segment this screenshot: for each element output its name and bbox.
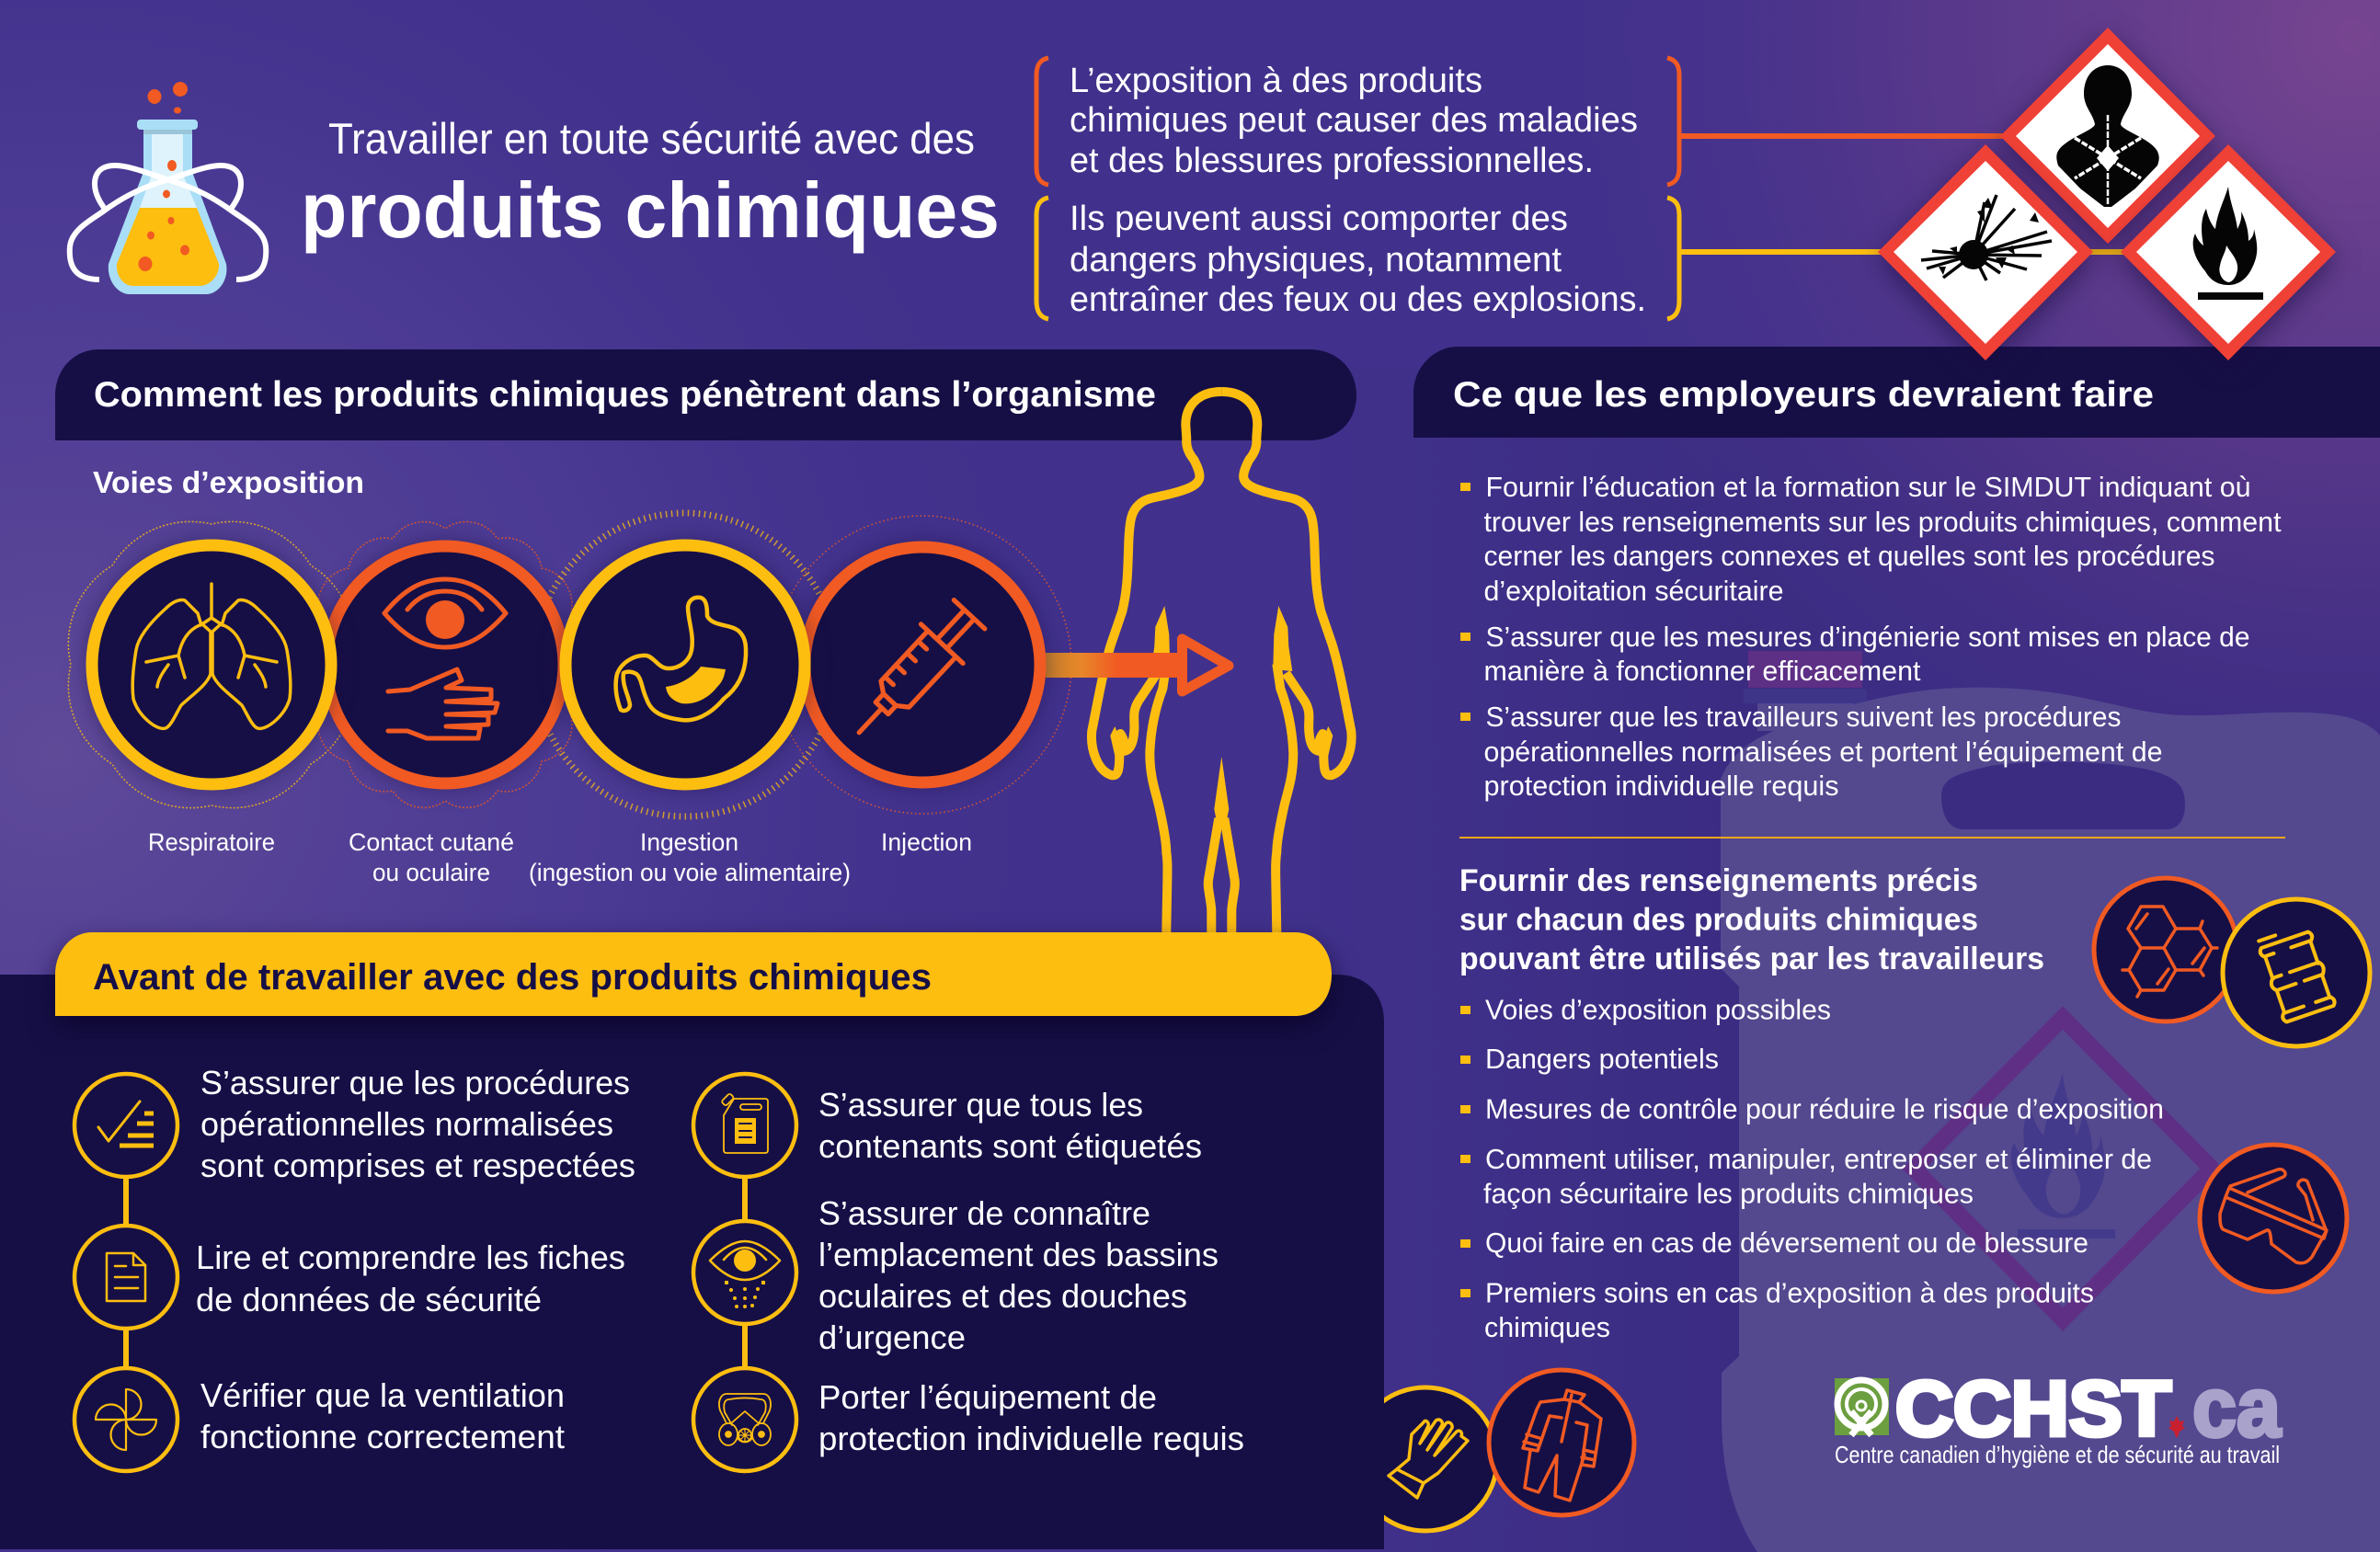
heading bar: left: Comment les produits chimiques pénètrent dans l’organisme: [94, 375, 1156, 415]
logo: CCHST: CCHST: [1895, 1365, 2171, 1452]
hazard diamond: flame: [2121, 144, 2336, 360]
route labels: Injection: [881, 828, 972, 856]
connectors: [126, 1125, 745, 1420]
information list: Quoi faire en cas de déversement ou de blessure: [1485, 1227, 2088, 1259]
logo: CCHST: [1835, 1361, 2282, 1468]
heading bar: right: Ce que les employeurs devraient faire: [1453, 375, 2154, 415]
arrow into body: [1046, 639, 1229, 691]
item: safety data sheets: Lire et comprendre les fiches: [196, 1238, 625, 1276]
dotted halos: [68, 513, 1071, 816]
text block: physical hazards: Ils peuvent aussi comporter des: [1070, 200, 1568, 238]
employer list: d’exploitation sécuritaire: [1484, 575, 1784, 607]
title: produits chimiques: [301, 167, 1000, 255]
route circle: ingestion: [566, 545, 805, 784]
item: ventilation: fonctionne correctement: [200, 1418, 565, 1455]
subheading: exposure routes: Voies d’exposition: [93, 465, 364, 499]
icon: eye and hand: [384, 579, 506, 738]
item: labelled containers: contenants sont étiquetés: [818, 1127, 1202, 1165]
text block: occupational illness: chimiques peut causer des maladies: [1070, 101, 1638, 140]
information list: Comment utiliser, manipuler, entreposer et éliminer de: [1485, 1143, 2152, 1175]
subheading: precise information: [1459, 863, 2044, 976]
route circle: respiratory: [92, 545, 331, 784]
route labels: Respiratoire: [148, 828, 275, 856]
icon: syringe: [838, 595, 990, 752]
employer list: [1460, 471, 2282, 802]
item: procedures: S’assurer que les procédures: [200, 1064, 630, 1101]
information list: Dangers potentiels: [1485, 1043, 1719, 1075]
logo: CCHST: Centre canadien d’hygiène et de sécurité au travail: [1835, 1441, 2280, 1468]
bracket and line: orange: [1036, 58, 2009, 185]
title: Travailler en toute sécurité avec des: [328, 114, 975, 163]
icon: body outline: [1092, 392, 1352, 932]
icon: stomach: [616, 598, 746, 720]
panel: before working: [0, 932, 1384, 1549]
employer list: protection individuelle requis: [1484, 770, 1839, 802]
item: eyewash: [693, 1194, 1219, 1356]
title: [301, 114, 1000, 255]
item: protective equipment: protection individuelle requis: [818, 1420, 1244, 1457]
item: ventilation: Vérifier que la ventilation: [200, 1376, 565, 1414]
watermark: flame diamond: [1914, 1018, 2212, 1319]
text block: physical hazards: entraîner des feux ou des explosions.: [1070, 280, 1646, 319]
text block: occupational illness: et des blessures professionnelles.: [1070, 142, 1594, 180]
text block: physical hazards: [1070, 200, 1646, 319]
employer list: S’assurer que les mesures d’ingénierie sont mises en place de: [1486, 621, 2249, 653]
employer list: cerner les dangers connexes et quelles sont les procédures: [1484, 540, 2214, 572]
text block: occupational illness: L’exposition à des produits: [1070, 62, 1482, 100]
item: procedures: sont comprises et respectées: [200, 1147, 635, 1184]
information list: façon sécuritaire les produits chimiques: [1483, 1177, 1974, 1210]
icon: flask with atom orbits: [70, 82, 266, 294]
route circle: contact: [326, 546, 564, 783]
route labels: [148, 828, 972, 886]
employer list: opérationnelles normalisées et portent l’équipement de: [1484, 736, 2163, 768]
hazard diamond: explosion: [1878, 144, 2093, 360]
icon: goggles: [2200, 1145, 2347, 1292]
hazard diamond: health hazard: [2000, 28, 2215, 244]
item: eyewash: d’urgence: [818, 1318, 966, 1356]
item: protective equipment: Porter l’équipement de: [818, 1378, 1157, 1416]
heading bar: before working: Avant de travailler avec des produits chimiques: [93, 957, 932, 998]
route labels: (ingestion ou voie alimentaire): [529, 859, 851, 886]
information list: Mesures de contrôle pour réduire le risque d’exposition: [1485, 1092, 2164, 1125]
subheading: precise information: Fournir des renseignements précis: [1459, 863, 1978, 898]
item: eyewash: oculaires et des douches: [818, 1277, 1187, 1315]
employer list: trouver les renseignements sur les produits chimiques, comment: [1484, 506, 2282, 538]
route labels: Ingestion: [640, 828, 738, 856]
heading bar: before working: [55, 932, 1332, 1016]
route circle: injection: [805, 547, 1040, 782]
watermark: jerrycan shape: [1721, 651, 2380, 1552]
icon: protective suit: [1489, 1370, 1634, 1515]
icon: molecule: [2094, 878, 2237, 1021]
item: procedures: opérationnelles normalisées: [200, 1105, 613, 1143]
item: eyewash: l’emplacement des bassins: [818, 1236, 1219, 1273]
heading bar: right: [1413, 347, 2380, 438]
item: safety data sheets: de données de sécurité: [196, 1281, 542, 1318]
item: ventilation: [74, 1368, 565, 1471]
text block: physical hazards: dangers physiques, notamment: [1070, 241, 1562, 280]
employer list: S’assurer que les travailleurs suivent les procédures: [1486, 701, 2121, 733]
information list: Premiers soins en cas d’exposition à des produits: [1485, 1276, 2094, 1309]
information list: Voies d’exposition possibles: [1485, 993, 1831, 1026]
bracket and line: yellow: [1036, 198, 2134, 319]
logo: CCHST: ca: [2192, 1361, 2282, 1455]
item: labelled containers: S’assurer que tous les: [818, 1086, 1143, 1124]
icon: glove: [1384, 1385, 1497, 1534]
route labels: Contact cutané: [349, 828, 514, 856]
item: procedures: [74, 1064, 635, 1184]
item: safety data sheets: [74, 1226, 625, 1329]
heading bar: left: [55, 349, 1356, 440]
information list: chimiques: [1484, 1311, 1610, 1343]
information list: [1460, 993, 2164, 1343]
item: labelled containers: [693, 1074, 1202, 1177]
subheading: precise information: pouvant être utilisés par les travailleurs: [1459, 941, 2044, 976]
text block: occupational illness: [1070, 62, 1638, 180]
icon: barrel: [2223, 899, 2370, 1046]
item: protective equipment: [693, 1368, 1244, 1471]
icon: lungs: [132, 584, 291, 728]
employer list: manière à fonctionner efficacement: [1484, 655, 1921, 687]
employer list: Fournir l’éducation et la formation sur le SIMDUT indiquant où: [1486, 471, 2251, 503]
subheading: precise information: sur chacun des produits chimiques: [1459, 903, 1978, 938]
item: eyewash: S’assurer de connaître: [818, 1194, 1150, 1232]
route labels: ou oculaire: [372, 859, 490, 886]
